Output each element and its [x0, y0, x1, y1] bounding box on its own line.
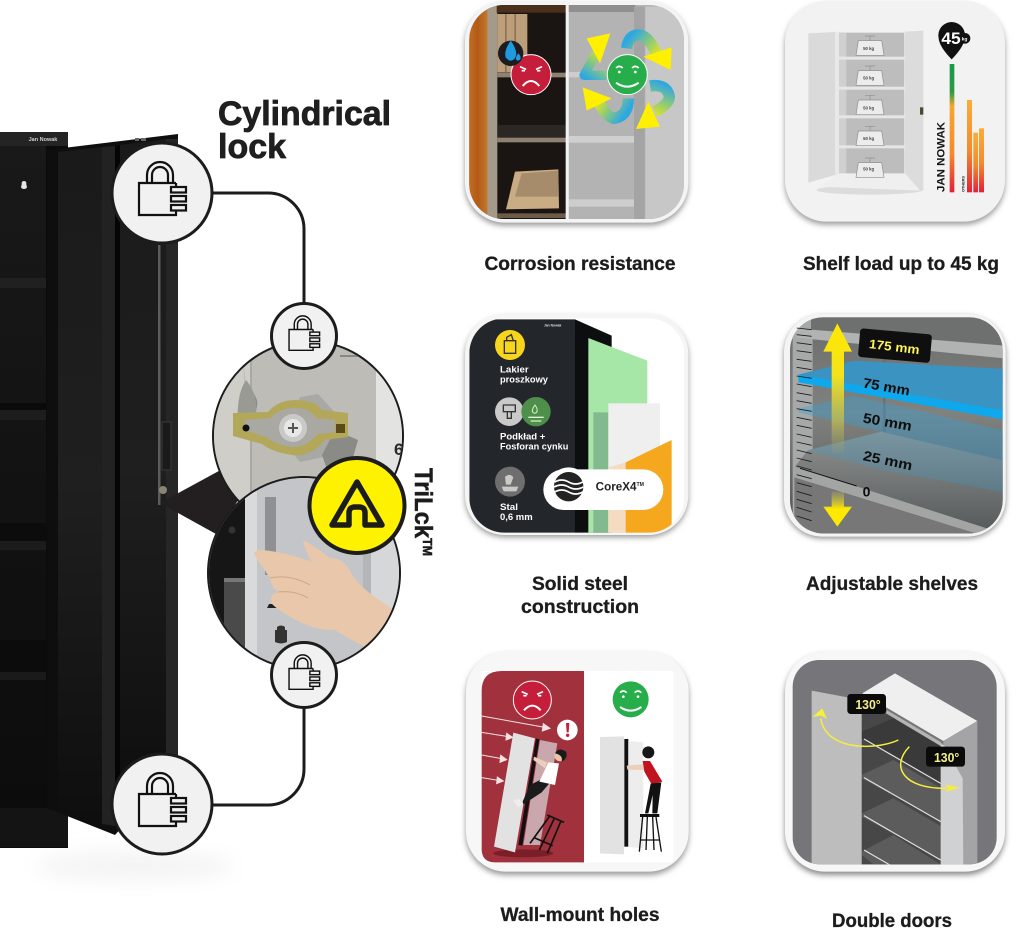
cabinet with weights	[808, 31, 923, 195]
clean half	[569, 3, 689, 220]
label: 75 mm: 75 mm	[862, 375, 911, 399]
label: 0	[800, 468, 871, 500]
photo circle: hand opening door	[207, 476, 401, 664]
label: 130 right	[926, 747, 965, 767]
caption: wall-mount holes: Wall-mount holes	[500, 905, 660, 926]
alert	[557, 720, 578, 740]
icon: happy face	[607, 55, 647, 95]
icon: sad face	[511, 55, 551, 95]
weights	[856, 36, 884, 177]
ruler ticks	[797, 328, 812, 521]
panel: double doors	[785, 652, 1010, 875]
label: 130 left	[847, 694, 886, 714]
icon: lock top large	[112, 143, 212, 243]
label: 130 left: 130°	[855, 698, 881, 712]
label: 175 mm: 175 mm	[868, 337, 920, 357]
cabinet body: Jan Nowak	[29, 137, 58, 143]
heading: Cylindrical lock: lock	[218, 128, 287, 166]
black metal cabinet with open door	[0, 132, 178, 848]
shelf edges	[864, 739, 941, 865]
bar chart: OTHERS	[962, 175, 966, 192]
pin: 45 kg: 45	[941, 29, 961, 48]
caption: adjustable shelves: Adjustable shelves	[806, 574, 978, 595]
label: TriLck rotated: TM	[420, 538, 435, 556]
icon: lock bottom large	[112, 754, 212, 854]
pin: 45 kg: kg	[962, 36, 967, 42]
bar chart: JAN NOWAK	[936, 121, 948, 192]
caption: solid steel construction: construction	[521, 597, 639, 618]
panel: solid steel construction	[465, 314, 690, 537]
caption: solid steel construction: Solid steel	[532, 574, 628, 595]
layer: powder paint	[495, 330, 548, 385]
red half	[482, 671, 584, 862]
rusty half	[467, 3, 567, 220]
label: 0: 0	[863, 484, 871, 500]
force arrows	[482, 716, 550, 784]
badge: yellow TriLock logo	[310, 458, 404, 553]
cabinet body	[0, 132, 68, 848]
blue shelf levels	[798, 396, 1004, 461]
layer: steel	[495, 467, 533, 522]
pin: 45 kg	[938, 22, 970, 59]
connector line top	[213, 193, 304, 303]
caption: corrosion resistance: Corrosion resistance	[484, 254, 676, 275]
photo circle: lock mechanism	[212, 344, 404, 502]
arrow: down	[823, 492, 852, 527]
panel: wall-mount holes	[466, 652, 689, 875]
small brand text: Jan Nowak	[544, 324, 562, 328]
layer: powder paint: proszkowy	[500, 375, 548, 385]
layer: steel: 0,6 mm	[500, 512, 533, 522]
label: TriLck rotated: TriLck	[409, 468, 437, 542]
layer: primer and zinc phosphate: Fosforan cynku	[500, 441, 568, 451]
layer: primer and zinc phosphate: Podkład +	[500, 431, 545, 441]
caption: solid steel construction	[521, 574, 639, 618]
recycling arrows	[583, 33, 672, 129]
panel: shelf load	[785, 1, 1005, 225]
falling child	[523, 780, 549, 804]
pointer wedge to lock detail	[160, 466, 250, 534]
floor shadow	[35, 852, 235, 880]
falling cabinet	[523, 740, 557, 845]
weight labels: 50 kg	[863, 105, 875, 110]
weight labels: 50 kg	[863, 167, 875, 172]
layer: powder paint: Lakier	[500, 364, 529, 374]
weight labels: 50 kg	[863, 136, 875, 141]
arrow: right door swing	[901, 747, 960, 792]
caption: shelf load: Shelf load up to 45 kg	[803, 254, 999, 275]
icon: lock top small	[272, 304, 336, 368]
label: 130 right: 130°	[934, 751, 959, 765]
badge: CoreX4: CoreX4	[596, 480, 638, 494]
open door	[47, 134, 178, 835]
icon: water drops	[498, 41, 523, 66]
panel: adjustable shelves	[784, 312, 1008, 546]
panel: corrosion resistance	[465, 0, 689, 227]
layer: steel: Stal	[500, 502, 518, 512]
lower shelf	[794, 432, 1004, 532]
label: 175 mm	[858, 328, 932, 363]
cabinet top	[862, 673, 977, 741]
badge: CoreX4: TM	[637, 482, 645, 488]
arrow: left door swing	[812, 708, 898, 746]
bar chart	[936, 64, 984, 192]
icon: lock bottom small	[272, 642, 336, 708]
arrow: up	[823, 323, 852, 453]
ruler strip	[793, 312, 813, 536]
layer: primer and zinc phosphate	[495, 397, 568, 451]
photo circle: lock mechanism: 6	[394, 440, 403, 459]
label: 50 mm: 50 mm	[862, 410, 913, 434]
label: 25 mm: 25 mm	[862, 447, 914, 473]
connector line bottom	[213, 642, 304, 805]
correct half	[600, 681, 662, 854]
weight labels: 50 kg	[863, 75, 875, 80]
badge: CoreX4	[543, 467, 663, 510]
heading: Cylindrical lock: Cylindrical	[218, 95, 391, 133]
heading: Cylindrical lock	[218, 95, 391, 166]
weight labels	[863, 46, 875, 172]
weight labels: 50 kg	[863, 46, 875, 51]
fallen stool	[530, 815, 564, 853]
